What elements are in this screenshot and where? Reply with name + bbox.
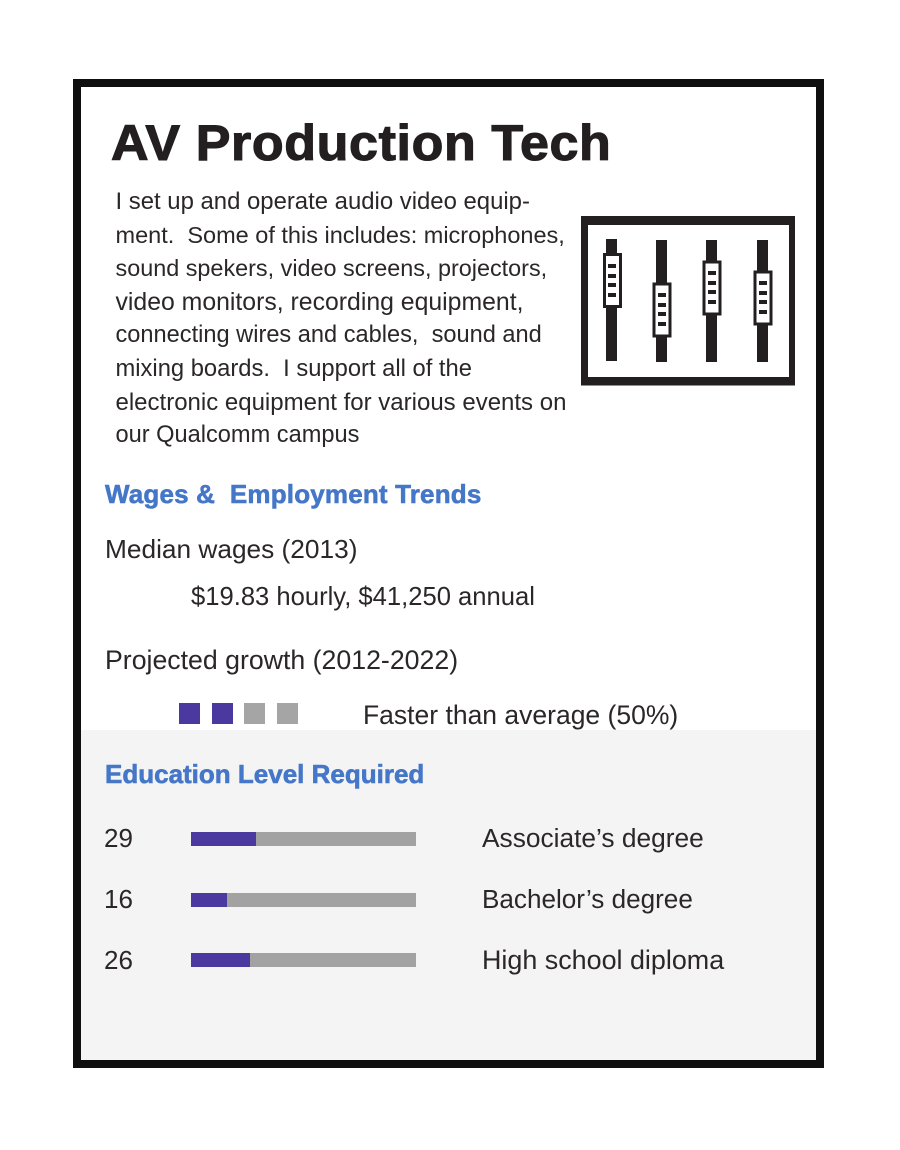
- text block: job description: [116, 188, 566, 448]
- text block: job description: I set up and operate audio video equip-: [116, 188, 530, 215]
- label: median wages: Median wages (2013): [105, 534, 357, 564]
- text block: job description: sound spekers, video screens, projectors,: [116, 255, 547, 281]
- text block: job description: video monitors, recording equipment,: [116, 289, 524, 316]
- bar: 29 percent: [191, 832, 416, 846]
- row: associate's degree: [104, 823, 704, 853]
- row: bachelor's degree: [104, 884, 693, 914]
- row: high school diploma: [104, 945, 724, 975]
- heading: wages and employment trends: Wages & Employment Trends: [105, 479, 481, 509]
- label: bachelor's degree: Bachelor’s degree: [482, 884, 693, 914]
- text block: job description: ment. Some of this includes: microphones,: [116, 222, 565, 248]
- icon: mixing board sliders: [581, 216, 795, 386]
- number: 26: 26: [104, 945, 133, 975]
- text block: job description: connecting wires and cables, sound and: [116, 322, 542, 348]
- panel: card frame: [73, 79, 824, 1068]
- text block: job description: our Qualcomm campus: [116, 422, 359, 448]
- label: projected growth: Projected growth (2012-2022): [105, 645, 458, 675]
- bar: 26 percent: [191, 953, 416, 967]
- value: wages: $19.83 hourly, $41,250 annual: [191, 583, 535, 611]
- panel: education background: [81, 730, 816, 1060]
- title: AV Production Tech: [110, 115, 611, 171]
- rating: growth squares: [179, 703, 298, 724]
- bar: 16 percent: [191, 893, 416, 907]
- text block: job description: mixing boards. I support all of the: [116, 355, 472, 382]
- label: high school diploma: High school diploma: [482, 945, 724, 975]
- heading: education level required: Education Level Required: [105, 759, 424, 789]
- number: 16: 16: [104, 884, 133, 914]
- number: 29: 29: [104, 823, 133, 853]
- text block: job description: electronic equipment for various events on: [116, 389, 566, 416]
- value: growth rate: Faster than average (50%): [363, 700, 678, 730]
- label: associate's degree: Associate’s degree: [482, 823, 704, 853]
